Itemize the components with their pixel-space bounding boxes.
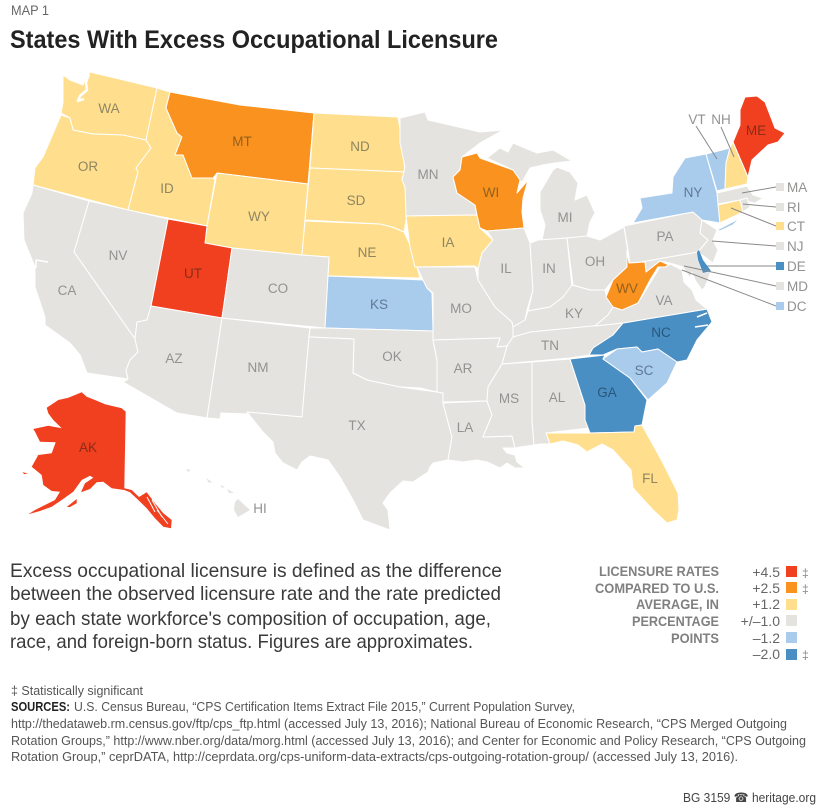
callout: NJ (776, 239, 804, 254)
legend (595, 563, 809, 662)
callout: RI (776, 200, 800, 215)
state: VT (706, 148, 730, 191)
state: CA: CA (58, 283, 76, 298)
legend item -2.0: ‡ (802, 648, 809, 662)
state: VA: VA (655, 293, 673, 308)
callout: MA (776, 180, 807, 195)
state: TX (247, 337, 452, 530)
state: SC: SC (635, 363, 654, 378)
state: AK (22, 392, 172, 528)
state: CT (718, 200, 743, 223)
state: NC (589, 309, 712, 362)
state: GA (570, 355, 647, 433)
legend item +2.5: +2.5 (752, 580, 780, 596)
legend item +1.2: +1.2 (752, 596, 780, 612)
callout: NH: NH (711, 112, 731, 127)
footnote and sources: U.S. Census Bureau, “CPS Certification Items Extract File 2015,” Current Population Survey, (74, 699, 575, 714)
callout: DE: DE (787, 259, 806, 274)
state: KY: KY (565, 306, 583, 321)
state: ND: ND (350, 139, 370, 154)
state: AR (433, 338, 507, 402)
state: KS: KS (370, 297, 388, 312)
legend item +/-1.0 (741, 613, 797, 629)
state: KS (325, 276, 433, 331)
state: AL (532, 359, 589, 445)
footnote and sources: Rotation Group,” ceprDATA, http://ceprdata.org/cps-uniform-data-extracts/cps-outgoing-rotation-group/ (accessed July 13, 2016). (11, 749, 738, 764)
state: WY (205, 173, 308, 255)
state: NV (74, 201, 168, 339)
map of states (22, 72, 785, 530)
state: NV: NV (109, 248, 127, 263)
legend item +2.5 (752, 580, 809, 596)
map label: MAP 1 (11, 3, 49, 18)
state: MD (630, 252, 711, 290)
state: AL: AL (549, 390, 566, 405)
footnote and sources: Rotation Groups,” http://www.nber.org/data/morg.html (accessed July 13, 2016); and Center for Economic and Policy Research, “CPS Outgoing (11, 733, 806, 748)
state: MA (717, 186, 763, 204)
state: ID (128, 88, 215, 226)
state: ID: ID (160, 181, 174, 196)
callout: DE (776, 259, 806, 274)
state: MT (166, 92, 314, 184)
state: RI (740, 198, 750, 212)
state: NY (633, 154, 740, 231)
callout labels for small northeastern states (682, 112, 808, 314)
state: HI (186, 469, 267, 517)
callout: DC: DC (787, 299, 807, 314)
state: IL: IL (500, 261, 512, 276)
footnote and sources: ‡ Statistically significant (11, 683, 143, 698)
state: SC (603, 347, 677, 400)
state: OR (33, 115, 151, 210)
state: WI: WI (483, 185, 499, 200)
state: MS: MS (499, 391, 519, 406)
callout: DC (776, 299, 807, 314)
state: LA: LA (457, 420, 473, 435)
legend heading: PERCENTAGE (632, 613, 719, 629)
state: AZ (123, 306, 222, 418)
legend heading: COMPARED TO U.S. (595, 580, 719, 596)
state: OR: OR (78, 159, 98, 174)
state: WV: WV (616, 281, 638, 296)
state: IA: IA (442, 235, 454, 250)
description text: race, and foreign-born status. Figures are approximates. (10, 631, 473, 653)
state: IL (478, 228, 533, 327)
state: AK: AK (79, 440, 97, 455)
footnote and sources: SOURCES: (11, 699, 70, 714)
state: VA (595, 264, 707, 326)
legend item +2.5: ‡ (802, 582, 809, 596)
state: KY (513, 285, 613, 337)
state: CO: CO (268, 281, 288, 296)
callout: RI: RI (787, 200, 800, 215)
callout: CT (776, 219, 805, 234)
state: ND (310, 113, 405, 172)
state: WY: WY (248, 209, 270, 224)
state: TN: TN (541, 338, 559, 353)
state: NY: NY (684, 185, 702, 200)
state: MI: MI (558, 210, 572, 225)
title: States With Excess Occupational Licensure (10, 26, 498, 54)
state: MI (487, 143, 595, 240)
state: SD (305, 168, 407, 232)
state: AZ: AZ (165, 351, 183, 366)
legend item +4.5: +4.5 (752, 564, 780, 580)
state: MT: MT (232, 134, 252, 149)
state: MO (417, 267, 513, 347)
legend heading: POINTS (671, 630, 719, 646)
callout: MA: MA (787, 180, 807, 195)
state: FL: FL (642, 471, 658, 486)
legend item +1.2 (752, 596, 797, 612)
description text (10, 560, 502, 653)
state: ME (733, 96, 785, 177)
state: GA: GA (597, 385, 617, 400)
state: NM (207, 318, 310, 419)
state: NH (725, 142, 748, 189)
callout: CT: CT (787, 219, 805, 234)
footnote and sources: http://thedataweb.rm.census.gov/ftp/cps_ftp.html (accessed July 13, 2016); National Bureau of Economic Research, “CPS Merged Outgoing (11, 716, 787, 731)
legend item +/-1.0: +/–1.0 (741, 613, 780, 629)
state: MS (483, 362, 534, 448)
callout: VT: VT (688, 112, 706, 127)
state: WA (61, 72, 157, 140)
state: UT (151, 219, 232, 318)
state: ME: ME (746, 123, 766, 138)
state: PA: PA (656, 229, 674, 244)
state: SD: SD (347, 193, 366, 208)
callout: MD (776, 279, 808, 294)
state: WV (606, 250, 669, 310)
state: NE: NE (358, 245, 376, 260)
leader lines (682, 126, 776, 306)
credit line: BG 3159 ☎ heritage.org (683, 790, 816, 805)
state: MO: MO (450, 301, 472, 316)
state: OK: OK (382, 349, 402, 364)
state: HI: HI (253, 501, 267, 516)
legend heading: AVERAGE, IN (636, 596, 719, 612)
legend heading: LICENSURE RATES (599, 563, 719, 579)
state: NE (302, 221, 420, 278)
state: OH: OH (585, 254, 605, 269)
state: WA: WA (98, 101, 120, 116)
description text: Excess occupational licensure is defined as the difference (10, 560, 502, 582)
legend heading (595, 563, 719, 646)
state: UT: UT (184, 266, 202, 281)
callout: NJ: NJ (787, 239, 804, 254)
description text: by each state workforce's composition of occupation, age, (10, 608, 491, 630)
legend item +4.5: ‡ (802, 566, 809, 580)
state: FL (546, 425, 679, 523)
state: IN (528, 238, 572, 311)
state: NC: NC (651, 325, 671, 340)
state: NJ (698, 220, 718, 263)
state: DE (697, 250, 711, 273)
legend item -1.2: –1.2 (753, 630, 780, 646)
legend item -2.0 (753, 646, 809, 662)
state: AR: AR (454, 361, 473, 376)
legend item -1.2 (753, 630, 797, 646)
legend item +4.5 (752, 564, 809, 580)
callout: MD: MD (787, 279, 808, 294)
state: MN: MN (418, 167, 438, 182)
state: MN (400, 112, 503, 216)
description text: between the observed licensure rate and the rate predicted (10, 583, 501, 605)
state: OK (309, 328, 437, 392)
state: NM: NM (248, 360, 268, 375)
state: CO (222, 248, 329, 328)
state: CA (23, 185, 138, 379)
legend item -2.0: –2.0 (753, 646, 780, 662)
state: OH (567, 227, 628, 290)
state: TN (502, 323, 623, 364)
state: WI (453, 153, 528, 231)
state: IA (406, 215, 493, 269)
state: IN: IN (542, 261, 556, 276)
footnote and sources (11, 683, 806, 764)
state: PA (624, 212, 708, 264)
state: TX: TX (348, 418, 366, 433)
state: LA (443, 401, 525, 468)
